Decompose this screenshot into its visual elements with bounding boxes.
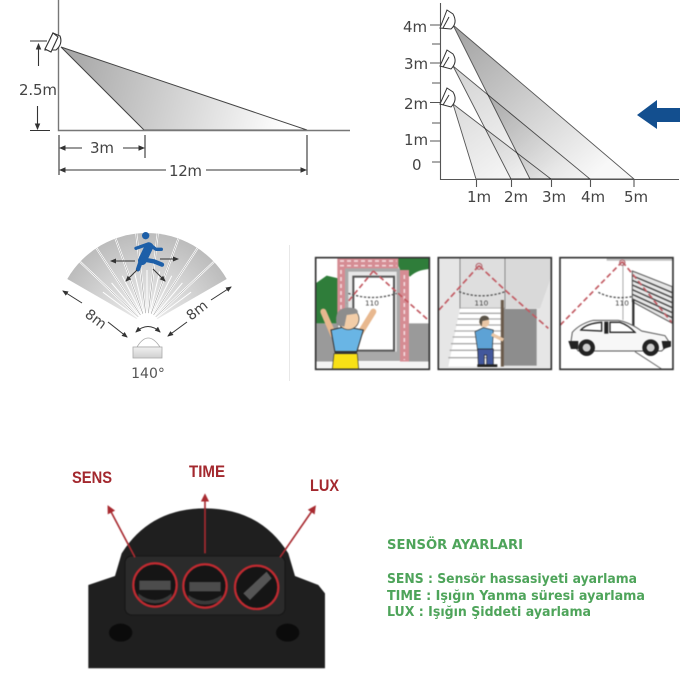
stairs	[448, 308, 503, 367]
detection lines	[439, 266, 548, 328]
detection lines	[560, 262, 672, 325]
door	[345, 268, 400, 361]
panel: doorway scene	[316, 258, 429, 369]
arrow: blue left arrow	[637, 100, 680, 129]
lower walls	[316, 323, 429, 362]
back wall	[460, 258, 505, 308]
dial: TIME	[183, 564, 227, 608]
divider	[288, 245, 290, 381]
wall post	[621, 262, 624, 320]
axes	[58, 0, 350, 130]
width dimensions	[59, 135, 307, 175]
sensor mark	[476, 263, 482, 269]
x labels	[467, 188, 648, 206]
label: 3m: 3m	[90, 139, 114, 157]
panel frame	[316, 258, 429, 369]
floor line	[635, 352, 662, 369]
y labels: 1m	[404, 131, 428, 149]
detection beam	[61, 47, 307, 130]
brick frame	[337, 258, 409, 362]
diagram: side view 2.5m mounting height with 3m to 12m range	[19, 0, 350, 180]
label: LUX: LUX	[310, 476, 340, 495]
label: 2.5m: 2.5m	[19, 81, 57, 99]
icon: sensors	[440, 10, 455, 107]
beam from 3m	[453, 66, 590, 179]
bushes	[316, 258, 429, 323]
fan slits	[80, 234, 214, 325]
axes and ticks	[430, 3, 679, 187]
brick mottling	[340, 261, 404, 360]
label: 110: 110	[615, 299, 629, 308]
panel: garage scene	[560, 258, 673, 369]
icon: running person	[136, 232, 162, 269]
diagram: 140 degree fan	[63, 232, 231, 382]
beam from 2m	[453, 104, 551, 179]
dial: LUX	[235, 566, 278, 609]
panel: staircase scene	[438, 258, 551, 369]
dial plate	[125, 556, 285, 615]
y labels	[403, 18, 428, 174]
y labels: 0	[412, 156, 422, 174]
dial: SENS	[133, 563, 177, 607]
beam from 4m	[453, 25, 634, 179]
fan center mask	[135, 313, 159, 337]
label: TIME: TIME	[189, 462, 225, 481]
car	[568, 320, 671, 356]
panel frame	[560, 258, 673, 369]
icon: sensor head	[133, 338, 162, 358]
detection lines	[347, 271, 429, 321]
photo: sensor adjustment dials	[88, 495, 325, 668]
label: 12m: 12m	[169, 162, 202, 180]
y labels: 4m	[403, 18, 427, 36]
dark block	[503, 309, 537, 366]
ceiling strip	[607, 258, 673, 261]
right wall	[506, 258, 551, 308]
x labels: 3m	[542, 188, 566, 206]
ground	[316, 362, 429, 369]
line: SENS: SENS : Sensör hassasiyeti ayarlama	[387, 572, 637, 587]
screw holes	[109, 624, 132, 642]
label: 8m right: 8m	[184, 298, 211, 324]
x labels: 5m	[624, 188, 648, 206]
y labels: 2m	[404, 95, 428, 113]
panel frame	[438, 258, 551, 369]
label: 110: 110	[474, 298, 489, 307]
label: 8m left: 8m	[82, 306, 109, 333]
line: TIME: TIME : Işığın Yanma süresi ayarlama	[387, 589, 645, 604]
line: LUX: LUX : Işığın Şiddeti ayarlama	[387, 605, 591, 620]
person on stairs	[475, 316, 503, 367]
x labels: 4m	[581, 188, 605, 206]
person waving	[323, 308, 373, 369]
x labels: 2m	[504, 188, 528, 206]
sensor mark	[620, 260, 625, 265]
y labels: 3m	[404, 55, 428, 73]
label: 140 degrees: 140°	[131, 366, 165, 382]
garage door	[632, 271, 672, 328]
device body	[88, 508, 325, 668]
red arrows	[108, 495, 315, 557]
height dimension	[30, 41, 50, 130]
icon: wall sensor	[45, 33, 61, 52]
text block: sensor settings	[387, 537, 645, 620]
x labels: 1m	[467, 188, 491, 206]
label: 110: 110	[365, 298, 379, 307]
heading: SENSÖR AYARLARI	[387, 537, 523, 553]
movement arrows	[63, 259, 231, 337]
fan sector	[67, 233, 227, 325]
diagram: range by mounting height	[403, 3, 680, 206]
label: SENS: SENS	[72, 468, 112, 487]
